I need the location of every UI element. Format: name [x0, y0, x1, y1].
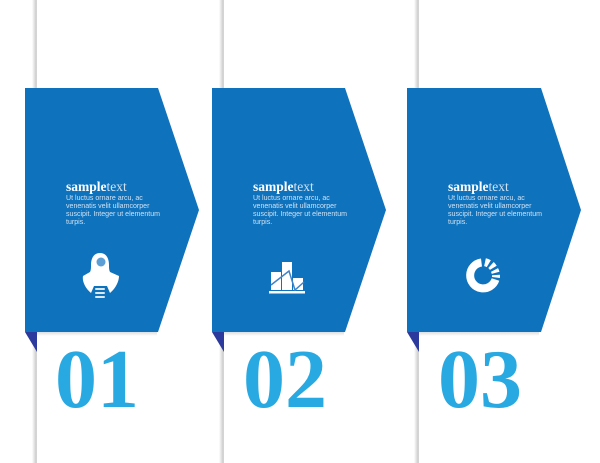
text block 2: suscipit. Integer ut elementum — [253, 211, 347, 218]
heading 2: sampletext — [253, 179, 314, 194]
text block 1 — [66, 195, 160, 226]
text block 3: venenatis velit ullamcorper — [448, 203, 532, 210]
icon: rocket — [83, 253, 119, 298]
fold 1 — [25, 332, 37, 352]
icon: bar chart — [269, 262, 305, 294]
panel: step 1 — [25, 88, 199, 426]
fold 3 — [407, 332, 419, 352]
number 01: 01 — [55, 333, 139, 426]
arrow panel 1 — [25, 88, 199, 332]
heading 3: sampletext — [448, 179, 509, 194]
text block 2: Ut luctus ornare arcu, ac — [253, 195, 330, 202]
text block 1: Ut luctus ornare arcu, ac — [66, 195, 143, 202]
text block 1: venenatis velit ullamcorper — [66, 203, 150, 210]
arrow panel 3 — [407, 88, 581, 332]
text block 2: turpis. — [253, 219, 272, 226]
panel: step 2 — [212, 88, 386, 426]
arrow panel 2 — [212, 88, 386, 332]
fold 2 — [212, 332, 224, 352]
text block 3 — [448, 195, 542, 226]
text block 2 — [253, 195, 347, 226]
text block 3: Ut luctus ornare arcu, ac — [448, 195, 525, 202]
icon: donut chart — [470, 262, 496, 288]
heading 1: sampletext — [66, 179, 127, 194]
number 03: 03 — [438, 333, 522, 426]
number 02: 02 — [243, 333, 327, 426]
text block 2: venenatis velit ullamcorper — [253, 203, 337, 210]
text block 1: suscipit. Integer ut elementum — [66, 211, 160, 218]
panel: step 3 — [407, 88, 581, 426]
text block 3: suscipit. Integer ut elementum — [448, 211, 542, 218]
text block 3: turpis. — [448, 219, 467, 226]
text block 1: turpis. — [66, 219, 85, 226]
